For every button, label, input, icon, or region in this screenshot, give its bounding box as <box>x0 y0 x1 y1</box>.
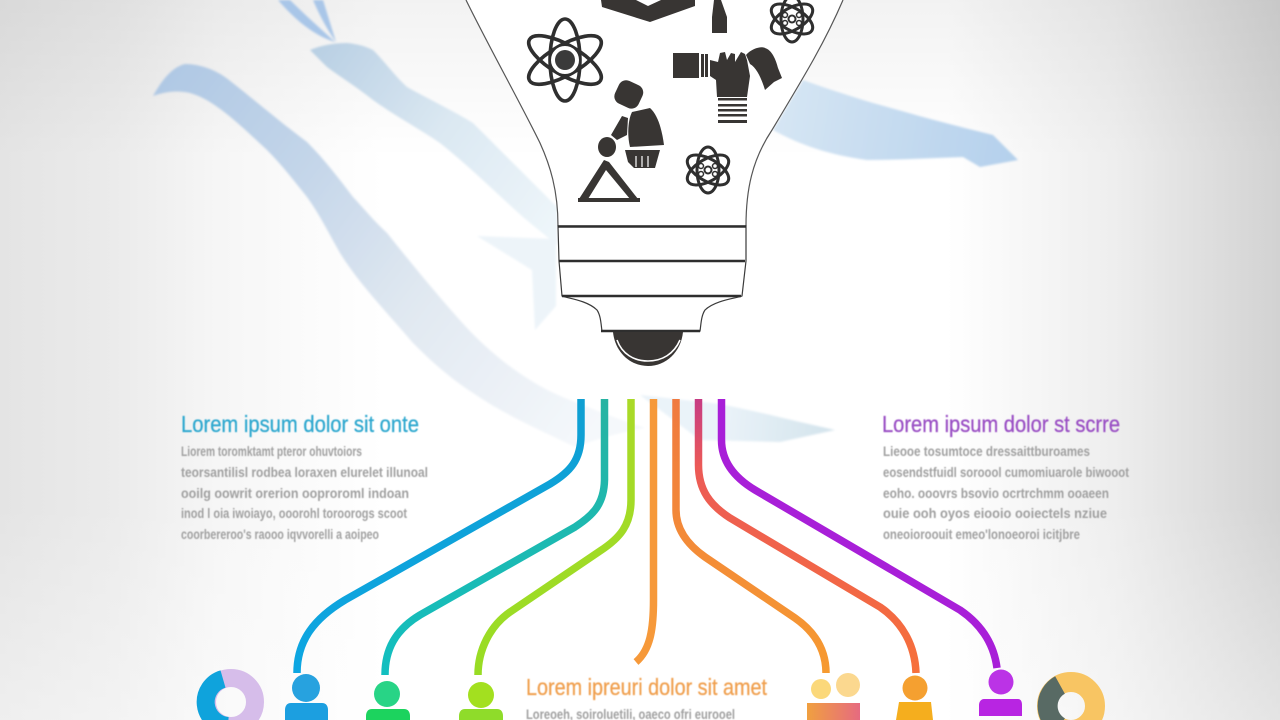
body: right: oneoioroouit emeo'lonoeoroi icitjbre <box>883 527 1080 542</box>
ribbon: pale chevron <box>477 236 556 330</box>
icon: seated figure on triangle <box>578 78 664 202</box>
body: left: inod l oia iwoiayo, ooorohl toroorogs scoot <box>181 506 407 521</box>
ribbon: lower tail <box>640 395 835 442</box>
ribbon: long left <box>153 64 645 447</box>
heading: left: Lorem ipsum dolor sit onte <box>181 411 419 437</box>
donut chart: right <box>1047 682 1095 720</box>
pipe: amber <box>676 399 826 673</box>
bulb cap <box>613 332 683 366</box>
body: left: teorsantilisl rodbea loraxen elurelet illunoal <box>181 465 428 480</box>
body: right: eoho. ooovrs bsovio ocrtrchmm ooaeen <box>883 486 1109 501</box>
ribbon: top slivers <box>278 0 336 42</box>
ribbon: upper left <box>310 43 557 245</box>
body: left: coorbereroo's raooo iqvvorelli a aoipeo <box>181 527 379 542</box>
body: right <box>883 444 1129 542</box>
pipe: blue <box>297 399 581 673</box>
ribbon: right <box>773 80 1018 167</box>
icon: lime person <box>459 682 503 720</box>
bulb screw base <box>558 226 746 331</box>
text block: bottom centre <box>526 674 768 720</box>
donut chart: left <box>206 678 255 720</box>
icon: bottle <box>712 0 727 33</box>
bulb glass <box>466 0 843 226</box>
text block: left <box>181 411 428 542</box>
body: right: Lieooe tosumtoce dressaittburoames <box>883 444 1090 459</box>
icon: small atom lower <box>683 147 733 193</box>
pipe: teal <box>385 399 604 675</box>
lightbulb <box>466 0 843 366</box>
pipes <box>297 399 997 675</box>
blue ribbons <box>153 0 1018 447</box>
icon: large atom <box>522 19 608 101</box>
icon: orange group <box>807 673 860 720</box>
icon: hand with sleeve <box>673 47 782 123</box>
body: left: Liorem toromktamt pteror ohuvtoiors <box>181 444 362 459</box>
text block: right <box>882 411 1129 542</box>
icon: purple person <box>979 670 1022 716</box>
pipe: green <box>478 399 631 675</box>
heading: right: Lorem ipsum dolor st scrre <box>882 411 1120 437</box>
body: right: eosendstfuidl soroool cumomiuarole biwooot <box>883 465 1129 480</box>
icon: green person <box>366 681 410 720</box>
icon: amber person <box>896 676 933 720</box>
icon: small atom top right <box>767 0 817 42</box>
body: left: ooilg oowrit orerion ooproroml indoan <box>181 486 409 501</box>
icon: blue person <box>285 674 328 720</box>
body: left <box>181 444 428 542</box>
pipe: red orange <box>698 399 916 673</box>
heading: bottom: Lorem ipreuri dolor sit amet <box>526 674 768 700</box>
pipe: centre orange <box>636 399 654 662</box>
pipe: purple <box>722 399 997 668</box>
body: right: ouie ooh oyos eiooio ooiectels nziue <box>883 506 1107 521</box>
icon: graduation shield <box>601 0 695 22</box>
